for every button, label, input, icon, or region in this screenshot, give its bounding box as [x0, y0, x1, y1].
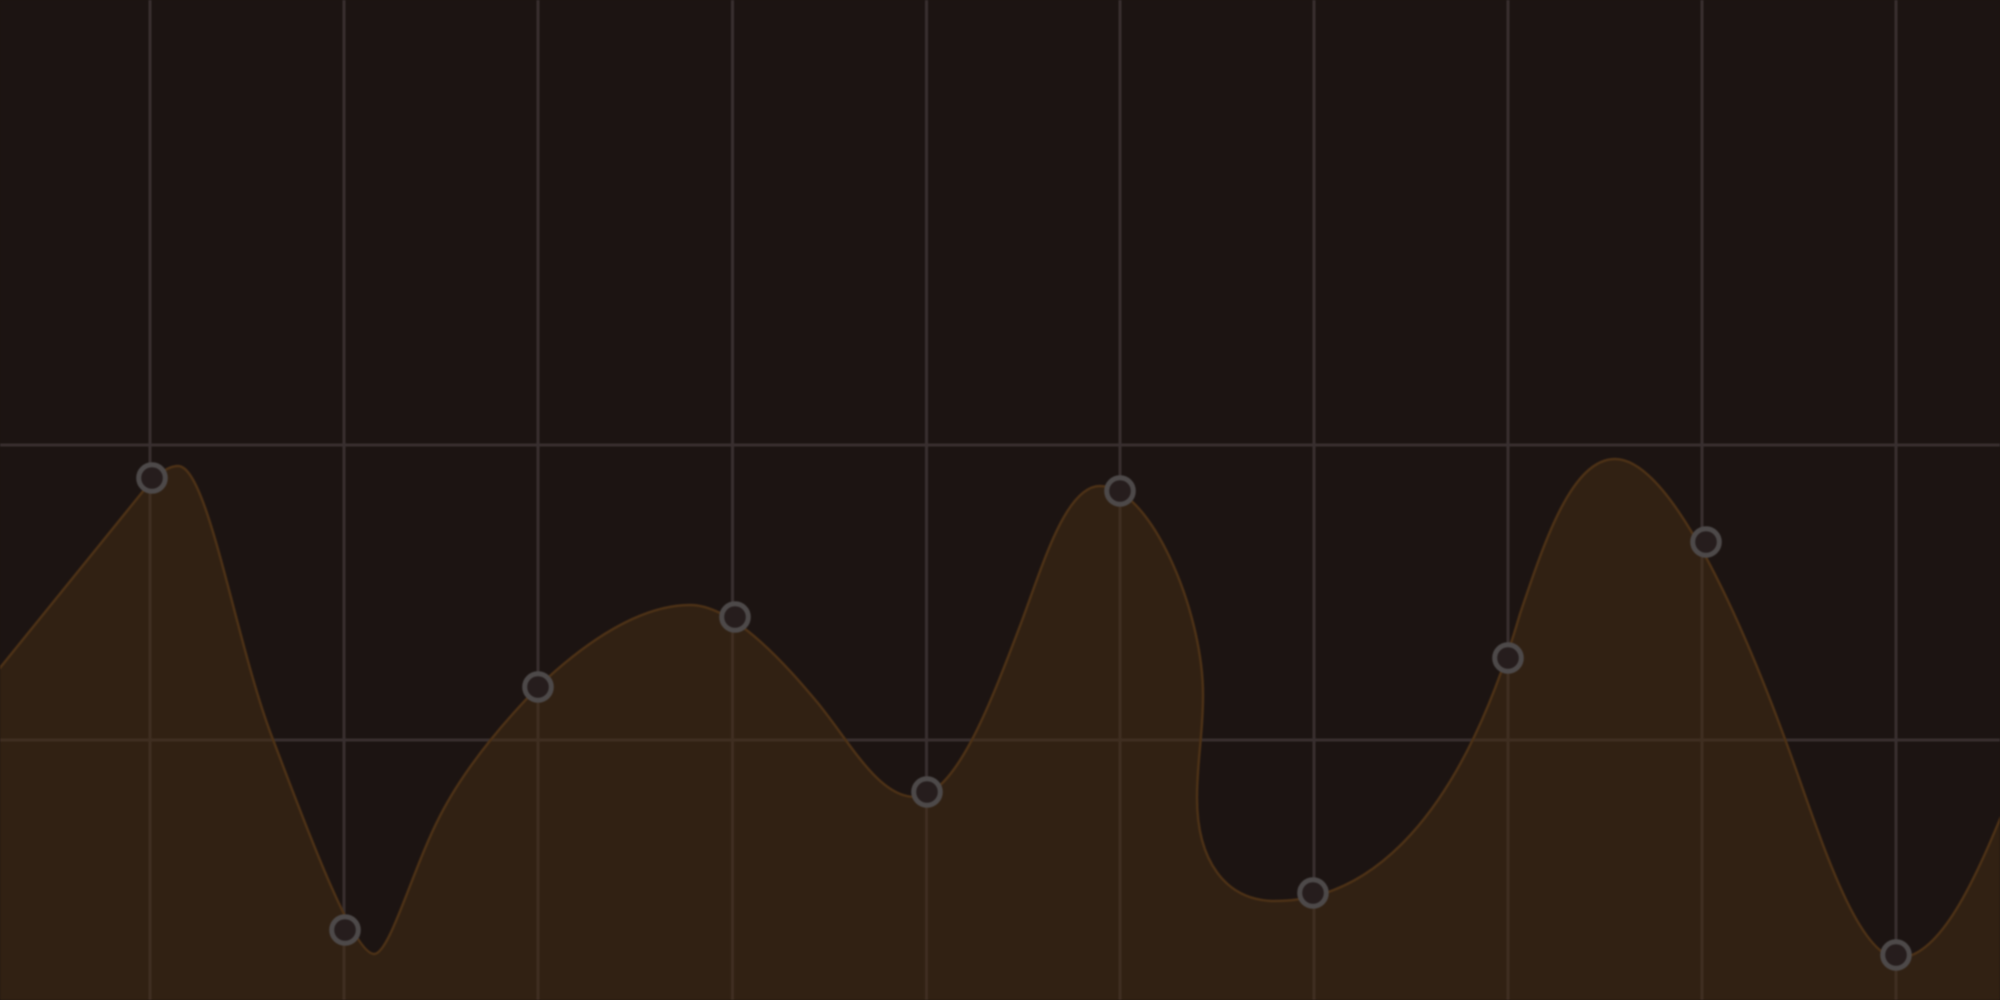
- area series: [0, 459, 2000, 1000]
- series line: [0, 459, 2000, 958]
- data points: [139, 465, 1909, 968]
